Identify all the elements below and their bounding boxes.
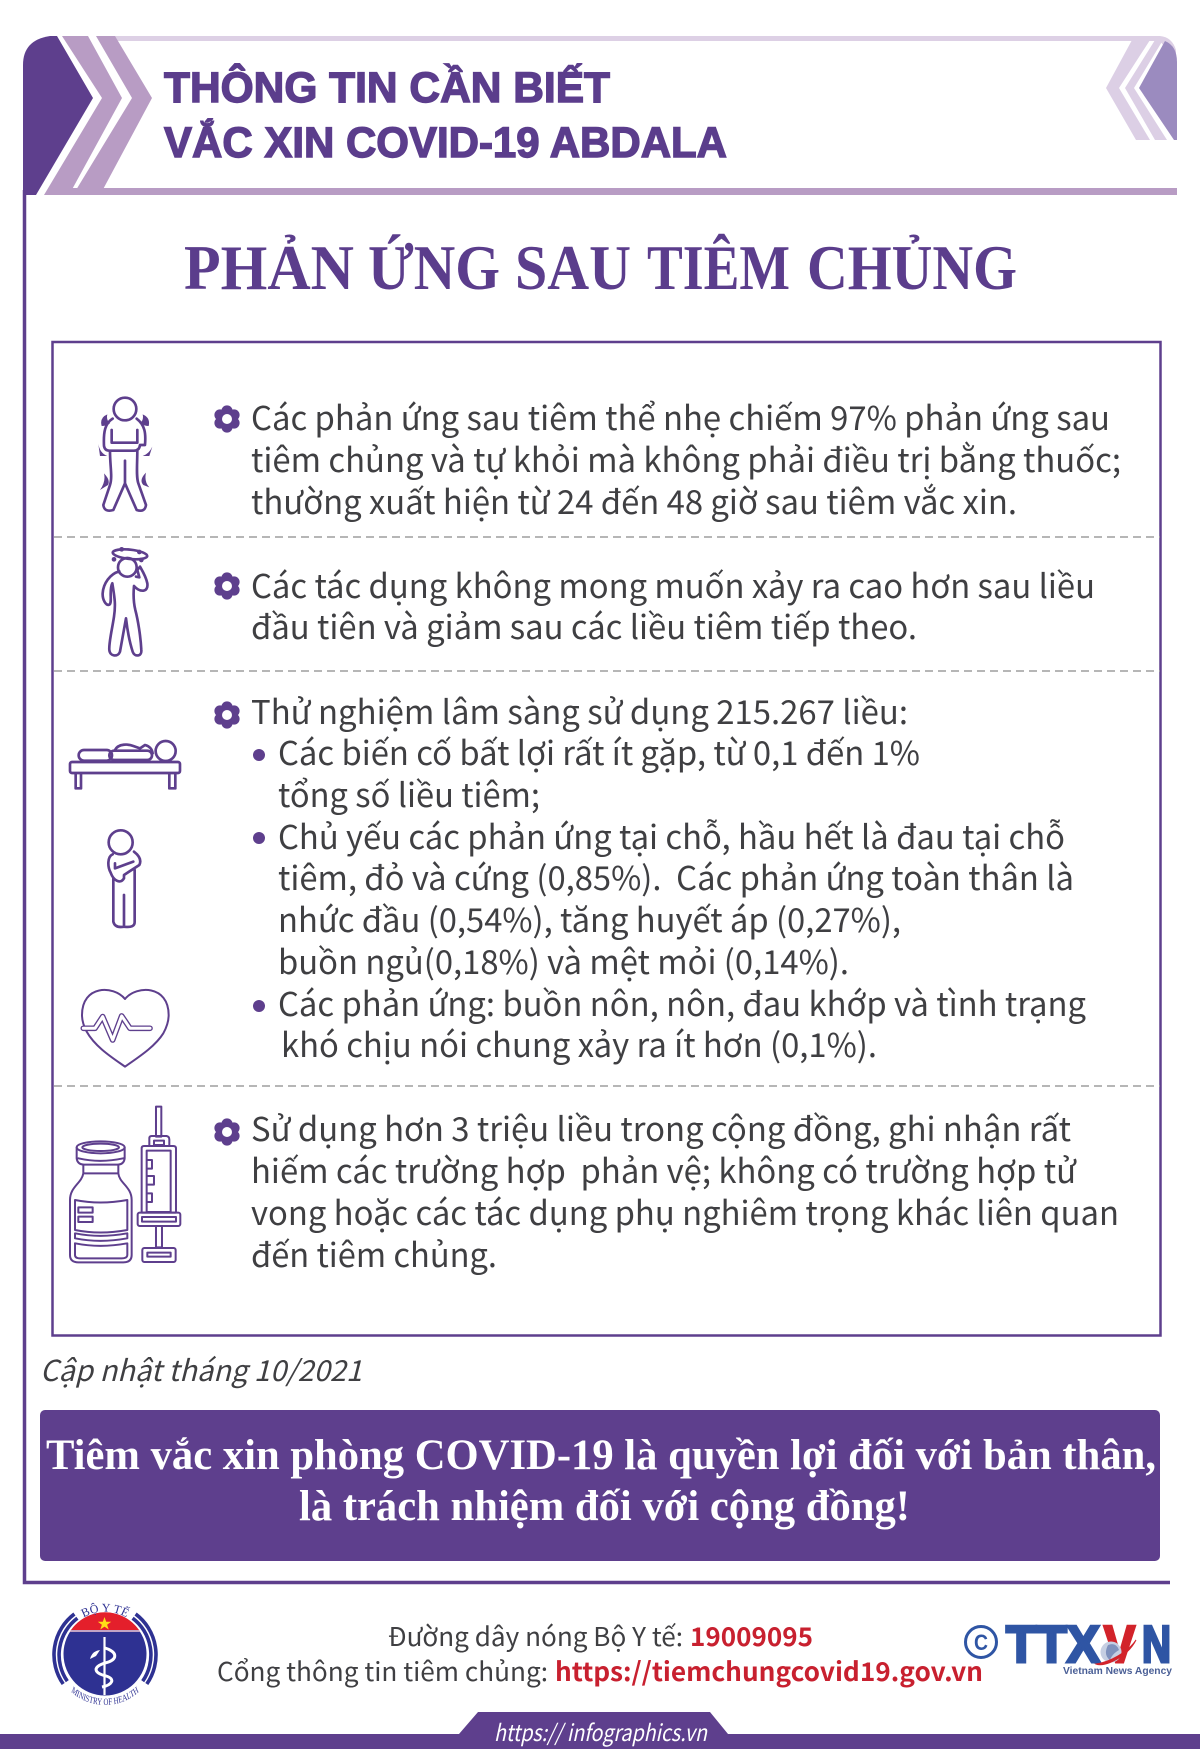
hotline text: Cổng thông tin tiêm chủng: [217, 1652, 548, 1689]
text block: community use [251, 1103, 1119, 1277]
text block: clinical trials: Chủ yếu các phản ứng tại chỗ, hầu hết là đau tại chỗ [278, 811, 1065, 859]
header title: THÔNG TIN CẦN BIẾT [164, 63, 610, 112]
text block: clinical trials: tổng số liều tiêm; [278, 769, 540, 817]
hotline text: 19009095 [690, 1617, 813, 1654]
main heading [184, 232, 1017, 303]
text block: community use: hiếm các trường hợp phản vệ; không có trường hợp tử [251, 1145, 1077, 1193]
bullet flowers [214, 405, 240, 1146]
icon: person with dizziness [103, 547, 148, 655]
text block: mild reactions [251, 392, 1121, 524]
slogan banner: Tiêm vắc xin phòng COVID-19 là quyền lợi đối với bản thân, [46, 1432, 1156, 1479]
text block: mild reactions: tiêm chủng và tự khỏi mà không phải điều trị bằng thuốc; [251, 434, 1121, 482]
text block: community use: Sử dụng hơn 3 triệu liều trong cộng đồng, ghi nhận rất [251, 1103, 1071, 1151]
main heading: TIÊM [647, 232, 790, 303]
icon: person with body aches [98, 398, 152, 511]
page frame [24, 190, 1170, 1582]
text block: mild reactions: thường xuất hiện từ 24 đến 48 giờ sau tiêm vắc xin. [251, 476, 1017, 524]
logo: TTXVN [966, 1616, 1172, 1677]
logo: TTXVN: V [1104, 1616, 1135, 1674]
slogan banner: là trách nhiệm đối với cộng đồng! [299, 1483, 910, 1530]
header banner [23, 36, 1177, 195]
text block: community use: đến tiêm chủng. [251, 1229, 497, 1277]
text block: side effects after first dose [251, 560, 1095, 649]
header title [164, 63, 727, 167]
text block: clinical trials: nhức đầu (0,54%), tăng huyết áp (0,27%), [278, 894, 901, 942]
icon: heart with pulse [82, 990, 169, 1067]
logo: TTXVN: Vietnam News Agency [1063, 1665, 1172, 1677]
text block: clinical trials: buồn ngủ(0,18%) và mệt mỏi (0,14%). [278, 936, 849, 984]
text block: clinical trials: Thử nghiệm lâm sàng sử dụng 215.267 liều: [251, 686, 908, 734]
main heading: CHỦNG [807, 232, 1017, 303]
logo: TTXVN: N [1142, 1616, 1171, 1674]
text block: clinical trials: tiêm, đỏ và cứng (0,85%). Các phản ứng toàn thân là [278, 852, 1074, 900]
text block: clinical trials [251, 686, 1086, 1067]
logo: TTXVN: C [974, 1630, 988, 1655]
hotline text: Đường dây nóng Bộ Y tế: [388, 1617, 683, 1654]
footer bar: https:// infographics.vn [494, 1714, 708, 1748]
header title: VẮC XIN COVID-19 ABDALA [164, 118, 727, 167]
logo: TTXVN: TTX [1006, 1616, 1100, 1674]
slogan banner [40, 1410, 1160, 1561]
update note: Cập nhật tháng 10/2021 [40, 1348, 362, 1390]
footer bar [0, 1712, 1200, 1749]
main heading: SAU [515, 232, 631, 303]
logo: Ministry of Health: MINISTRY OF HEALTH [71, 1686, 139, 1705]
text block: community use: vong hoặc các tác dụng phụ nghiêm trọng khác liên quan [251, 1187, 1119, 1235]
hotline text: https://tiemchungcovid19.gov.vn [555, 1652, 983, 1689]
bullet dots [253, 749, 265, 1012]
text block: clinical trials: Các biến cố bất lợi rất ít gặp, từ 0,1 đến 1% [278, 727, 920, 775]
text block: side effects after first dose: Các tác dụng không mong muốn xảy ra cao hơn sau liều [251, 560, 1095, 608]
text block: mild reactions: Các phản ứng sau tiêm thể nhẹ chiếm 97% phản ứng sau [251, 392, 1110, 440]
logo: Ministry of Health [52, 1602, 158, 1705]
main heading: ỨNG [368, 232, 500, 303]
text block: side effects after first dose: đầu tiên và giảm sau các liều tiêm tiếp theo. [251, 601, 917, 649]
text block: clinical trials: Các phản ứng: buồn nôn, nôn, đau khớp và tình trạng [278, 978, 1086, 1026]
logo: Ministry of Health: BỘ Y TẾ [80, 1602, 130, 1618]
text block: clinical trials: khó chịu nói chung xảy ra ít hơn (0,1%). [281, 1019, 877, 1067]
icon: person holding stomach [108, 830, 140, 927]
icon: vaccine vial and syringe [70, 1107, 180, 1262]
content panel [52, 342, 1160, 1336]
icon: person lying on bed [70, 741, 180, 788]
main heading: PHẢN [184, 232, 354, 303]
hotline text [217, 1617, 983, 1689]
